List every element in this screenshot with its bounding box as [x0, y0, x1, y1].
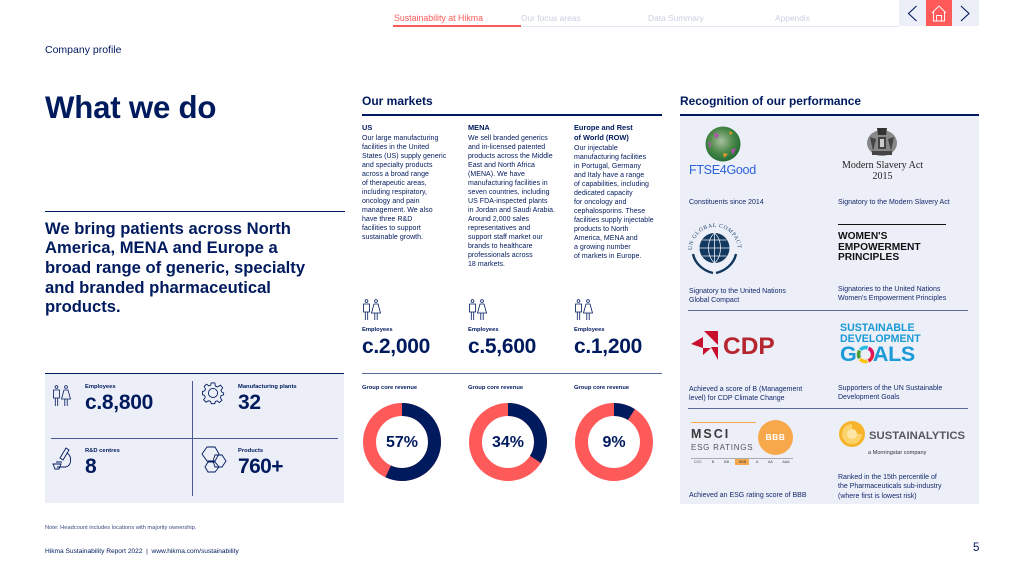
text: Europe and ROW: and Italy have a range	[574, 172, 644, 178]
icon: employees	[53, 385, 71, 406]
stat: ROW employees: Employees	[574, 327, 605, 333]
logo: Women's Empowerment Principles: WOMEN'S	[838, 231, 887, 242]
stat: US employees: Employees	[362, 327, 393, 333]
caption: Sustainalytics: the Pharmaceuticals sub-industry	[838, 483, 942, 490]
donut chart: ROW 9%	[575, 403, 653, 481]
logo: Sustainalytics: a Morningstar company	[868, 450, 926, 456]
heading: recognition: Recognition of our performance	[680, 94, 861, 108]
logo: Modern Slavery Act: Modern Slavery Act	[842, 160, 923, 171]
caption: Women's Empowerment Principles: Signatories to the United Nations	[838, 286, 940, 293]
logo: Sustainalytics	[839, 421, 965, 456]
label: ROW revenue: Group core revenue	[574, 385, 629, 391]
stat: ROW employees: c.1,200	[574, 335, 642, 358]
intro statement	[45, 211, 345, 319]
stat: US employees: c.2,000	[362, 335, 430, 358]
navigation tabs: Sustainability at Hikma	[394, 13, 483, 23]
text: US: including respiratory,	[362, 189, 427, 196]
text: MENA: US FDA-inspected plants	[468, 198, 548, 205]
caption: Sustainable Development Goals	[838, 384, 942, 401]
text: US: and specialty products	[362, 162, 433, 169]
intro statement: broad range of generic, specialty	[45, 258, 305, 277]
logo: MSCI ESG ratings: CCC B BB BBB A AA AAA	[694, 460, 790, 464]
intro statement: America, MENA and Europe a	[45, 238, 278, 257]
stat: products: Products	[238, 448, 263, 454]
caption: UN Global Compact: Signatory to the United Nations	[689, 288, 786, 295]
caption: Sustainable Development Goals: Development Goals	[838, 394, 899, 401]
text: US: of therapeutic areas,	[362, 180, 427, 187]
caption: Modern Slavery Act: Signatory to the Modern Slavery Act	[838, 199, 950, 206]
panel: group key figures	[45, 373, 344, 503]
text: Europe and ROW: products to North	[574, 226, 628, 232]
text: Europe and ROW: manufacturing facilities	[574, 154, 646, 160]
text: MENA: brands to healthcare	[468, 243, 533, 250]
text: US: Our large manufacturing	[362, 135, 438, 142]
caption: Sustainalytics	[838, 474, 942, 500]
donut chart: US 57%	[363, 403, 441, 481]
stat: R&D centres	[85, 448, 120, 478]
page number: 5	[973, 542, 979, 554]
caption: Sustainalytics: Ranked in the 15th percentile of	[838, 474, 937, 481]
donut chart: US 57%: 57%	[386, 434, 418, 451]
navigation buttons	[899, 0, 979, 26]
donut chart: MENA 34%	[469, 403, 547, 481]
donut chart: MENA 34%: 34%	[492, 434, 524, 451]
text: Europe and ROW: America, MENA and	[574, 234, 638, 242]
text: Europe and ROW: facilities supply injectable	[574, 216, 654, 224]
text: MENA: East and North Africa	[468, 162, 535, 169]
text: US: across a broad range	[362, 171, 429, 178]
icon: hexagons	[202, 446, 226, 472]
stat: employees: Employees	[85, 384, 116, 390]
icon: US employees	[363, 299, 381, 320]
text: US: have three R&D	[362, 216, 412, 223]
heading: recognition	[680, 94, 979, 116]
text: US: US	[362, 123, 372, 132]
footnote: Note: Headcount includes locations with majority ownership.	[45, 525, 196, 531]
icon: ROW employees	[575, 299, 593, 320]
panel: recognition	[680, 116, 979, 504]
logo: UN Global Compact	[688, 223, 742, 274]
stat: manufacturing plants	[238, 384, 297, 414]
caption: UN Global Compact: Global Compact	[689, 297, 739, 304]
logo: Sustainable Development Goals: GOALS	[840, 342, 915, 366]
caption: Women's Empowerment Principles	[838, 286, 946, 302]
logo: MSCI ESG ratings: MSCI	[691, 427, 730, 441]
heading: our markets: Our markets	[362, 94, 433, 108]
text: MENA: Around 2,000 sales	[468, 216, 529, 223]
navigation tabs	[393, 12, 899, 27]
label: MENA revenue: Group core revenue	[468, 385, 523, 391]
icon: microscope	[52, 447, 72, 470]
logo: Women's Empowerment Principles: EMPOWERMENT	[838, 242, 921, 252]
text: MENA: and in-licensed patented	[468, 144, 545, 151]
logo: CDP: CDP	[723, 333, 775, 360]
caption: UN Global Compact	[689, 288, 786, 304]
text: Europe and ROW: a growing number	[574, 244, 631, 250]
text: MENA: seven countries, including	[468, 189, 550, 196]
text: MENA: representatives and	[468, 225, 530, 232]
logo: CDP	[691, 331, 775, 360]
caption: MSCI: Achieved an ESG rating score of BBB	[689, 492, 807, 499]
navigation tabs: Our focus areas	[521, 13, 581, 23]
caption: CDP	[689, 386, 802, 402]
stat: manufacturing plants: 32	[238, 391, 261, 414]
intro statement: We bring patients across North	[45, 218, 291, 238]
logo: MSCI ESG ratings: ESG RATINGS	[691, 443, 753, 452]
text: US	[362, 123, 446, 241]
text: MENA: in Jordan and Saudi Arabia.	[468, 207, 555, 214]
text: US: sustainable growth.	[362, 234, 423, 241]
logo: Sustainable Development Goals: DEVELOPMENT	[840, 333, 921, 345]
stat: MENA employees: c.5,600	[468, 335, 536, 358]
label: US revenue: Group core revenue	[362, 385, 417, 391]
logo: UN Global Compact: UN GLOBAL COMPACT	[688, 223, 742, 250]
stat: employees: c.8,800	[85, 391, 153, 414]
caption: CDP: Achieved a score of B (Management	[689, 386, 802, 393]
caption: Sustainable Development Goals: Supporters of the UN Sustainable	[838, 385, 942, 392]
logo: Sustainable Development Goals	[840, 322, 921, 366]
text: Europe and ROW: Our injectable	[574, 144, 618, 152]
text: Europe and ROW: Europe and Rest	[574, 123, 633, 132]
footer: Hikma Sustainability Report 2022 | www.hikma.com/sustainability	[45, 548, 239, 554]
caption: CDP: level) for CDP Climate Change	[689, 395, 785, 402]
logo: Modern Slavery Act	[842, 128, 923, 182]
text: MENA: professionals across	[468, 252, 533, 259]
section label: Company profile	[45, 44, 121, 56]
logo: Women's Empowerment Principles	[838, 224, 946, 265]
text: Europe and ROW: of World (ROW)	[574, 133, 629, 142]
text: MENA: We sell branded generics	[468, 135, 548, 142]
title: What we do	[45, 90, 216, 124]
stat: MENA employees: Employees	[468, 327, 499, 333]
text: MENA: 18 markets.	[468, 261, 505, 268]
text: Europe and ROW: for oncology and	[574, 198, 626, 206]
logo: MSCI ESG ratings: BBB	[766, 432, 785, 442]
logo: Sustainalytics: SUSTAINALYTICS	[869, 430, 965, 442]
text: Europe and ROW	[574, 123, 654, 260]
text: US: States (US) supply generic	[362, 153, 446, 160]
text: US: oncology and pain	[362, 198, 420, 205]
icon: MENA employees	[469, 299, 487, 320]
text: Europe and ROW: of capabilities, including	[574, 180, 649, 188]
text: Europe and ROW: dedicated capacity	[574, 190, 633, 196]
text: MENA: products across the Middle	[468, 153, 553, 160]
logo: Sustainable Development Goals: SUSTAINABLE	[840, 322, 915, 334]
heading: our markets	[362, 94, 662, 116]
text: US: facilities to support	[362, 225, 421, 232]
text: Europe and ROW: of markets in Europe.	[574, 252, 641, 260]
stat: R&D centres: 8	[85, 455, 96, 478]
logo: FTSE4Good: FTSE4Good	[689, 163, 756, 177]
text: MENA: support staff market our	[468, 234, 543, 241]
icon: gear	[202, 382, 224, 404]
caption: Sustainalytics: (where first is lowest risk)	[838, 493, 917, 500]
stat: manufacturing plants: Manufacturing plants	[238, 384, 297, 390]
text: MENA: MENA	[468, 123, 490, 132]
logo: Women's Empowerment Principles: PRINCIPLES	[838, 252, 899, 263]
logo: Modern Slavery Act: 2015	[872, 171, 892, 182]
stat: R&D centres: R&D centres	[85, 448, 120, 454]
caption: Women's Empowerment Principles: Women's Empowerment Principles	[838, 295, 946, 302]
intro statement: and branded pharmaceutical	[45, 278, 271, 297]
donut chart: ROW 9%: 9%	[602, 434, 626, 451]
text: MENA: (MENA). We have	[468, 171, 525, 178]
stat: products: 760+	[238, 455, 283, 478]
caption: FTSE4Good: Constituents since 2014	[689, 199, 764, 206]
text: Europe and ROW: cephalosporins. These	[574, 208, 645, 214]
text: US: management. We also	[362, 207, 433, 214]
navigation tabs: Appendix	[775, 13, 810, 23]
intro statement: products.	[45, 297, 121, 316]
text: US: facilities in the United	[362, 144, 429, 151]
text: MENA: manufacturing facilities in	[468, 180, 548, 187]
text: MENA	[468, 123, 555, 268]
text: Europe and ROW: in Portugal, Germany	[574, 162, 641, 170]
navigation tabs: Data Summary	[648, 13, 704, 23]
logo: MSCI ESG ratings	[691, 420, 793, 465]
logo: FTSE4Good	[689, 126, 756, 177]
